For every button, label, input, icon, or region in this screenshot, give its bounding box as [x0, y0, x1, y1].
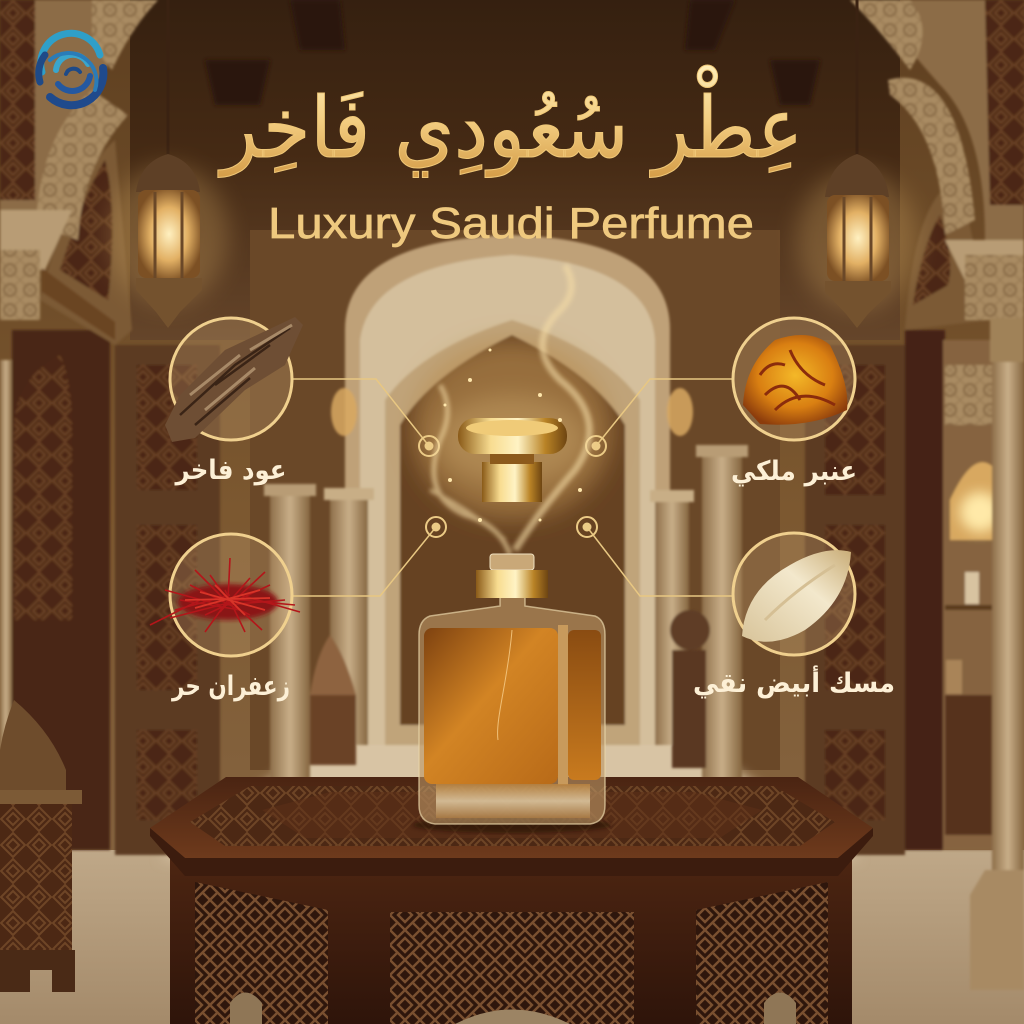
label: amber: عنبر ملكي — [731, 456, 857, 487]
title arabic: عِطْر سُعُودِي فَاخِر — [217, 65, 803, 178]
ingredient: oud — [165, 317, 303, 486]
bottle cap — [437, 395, 587, 502]
table arch cutouts — [230, 992, 796, 1024]
label: white musk: مسك أبيض نقي — [693, 665, 895, 699]
ingredient: amber — [731, 318, 857, 487]
left architecture — [0, 0, 220, 890]
ingredient: saffron — [150, 534, 300, 702]
label: saffron: زعفران حر — [170, 671, 290, 702]
label: oud: عود فاخر — [174, 455, 286, 486]
right architecture — [805, 0, 1024, 990]
connector lines — [292, 379, 732, 596]
left hanging lantern — [108, 0, 228, 328]
table — [150, 777, 873, 1024]
floor lantern left — [0, 700, 82, 992]
ingredient: white musk — [693, 533, 895, 699]
floor — [0, 850, 1024, 1024]
title english: Luxury Saudi Perfume — [268, 199, 754, 248]
right hanging lantern — [797, 0, 917, 328]
sparkles — [444, 348, 582, 522]
table carved panels — [195, 882, 328, 1024]
logo — [39, 33, 103, 105]
smoke — [430, 265, 589, 555]
perfume bottle — [412, 554, 612, 833]
central arch corridor — [264, 235, 748, 780]
connector nodes — [419, 436, 606, 537]
